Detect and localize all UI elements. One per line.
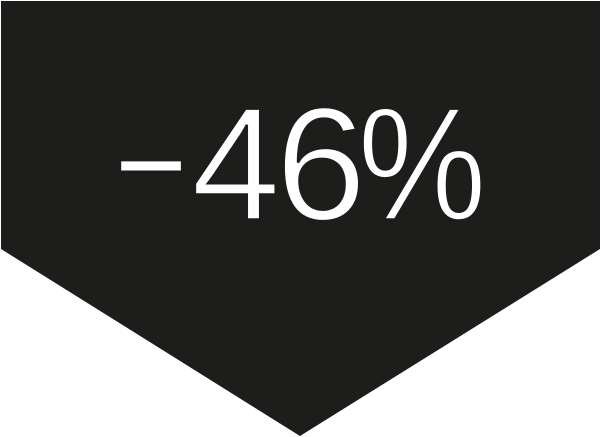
value label: 4 [191, 74, 280, 254]
value label: 6 [275, 74, 366, 254]
value label: − [114, 74, 188, 254]
value label: % [358, 74, 487, 254]
